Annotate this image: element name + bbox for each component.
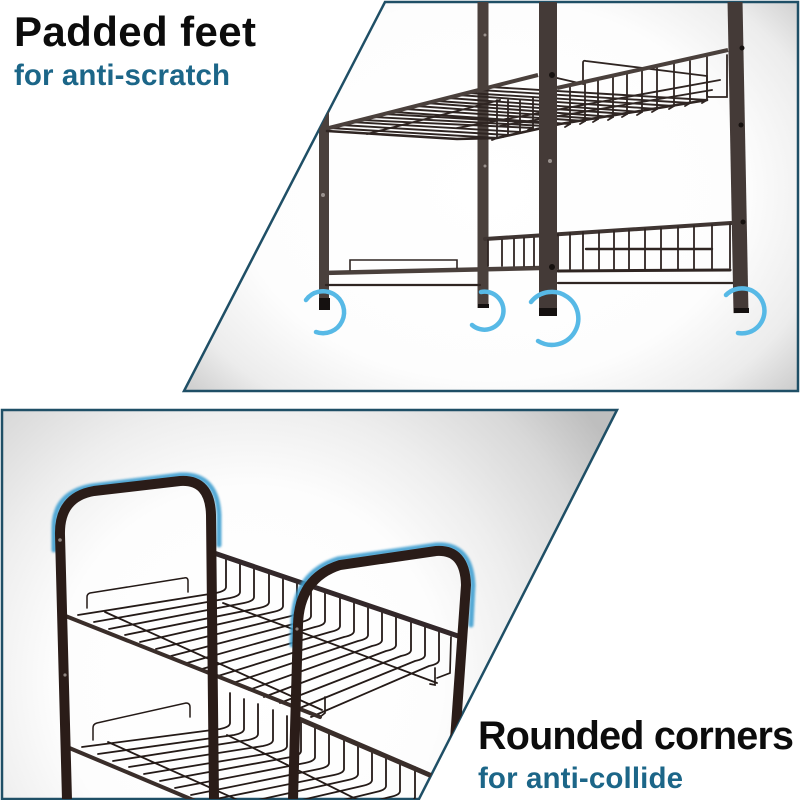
panel: rounded corners	[2, 410, 617, 800]
upper basket: wire deck with back hooks	[78, 557, 451, 717]
upper shelf hooks and end guard	[492, 55, 727, 140]
back posts	[478, 0, 488, 308]
subtitle: for anti-scratch: for anti-scratch	[14, 59, 230, 92]
panel: padded feet	[184, 0, 798, 391]
lower wire shelf	[322, 268, 540, 273]
icon: blue highlight arcs around feet	[306, 288, 764, 345]
front and right posts	[539, 0, 557, 315]
shelf rack: lower section	[322, 0, 741, 315]
post bolts	[58, 538, 299, 677]
upper wire shelf deck	[330, 80, 720, 138]
padded feet black caps	[319, 298, 749, 316]
left frame with blue glow	[54, 475, 219, 550]
shelf rails	[214, 553, 458, 636]
right frame with blue glow	[292, 545, 473, 645]
title: rounded corners: Rounded corners	[478, 714, 794, 758]
shelf rack: top section	[54, 475, 473, 800]
lower basket: wire deck with back hooks	[82, 693, 415, 800]
subtitle: for anti-collide: for anti-collide	[478, 762, 683, 795]
post bolts	[549, 46, 746, 270]
title: padded feet: Padded feet	[14, 8, 256, 55]
